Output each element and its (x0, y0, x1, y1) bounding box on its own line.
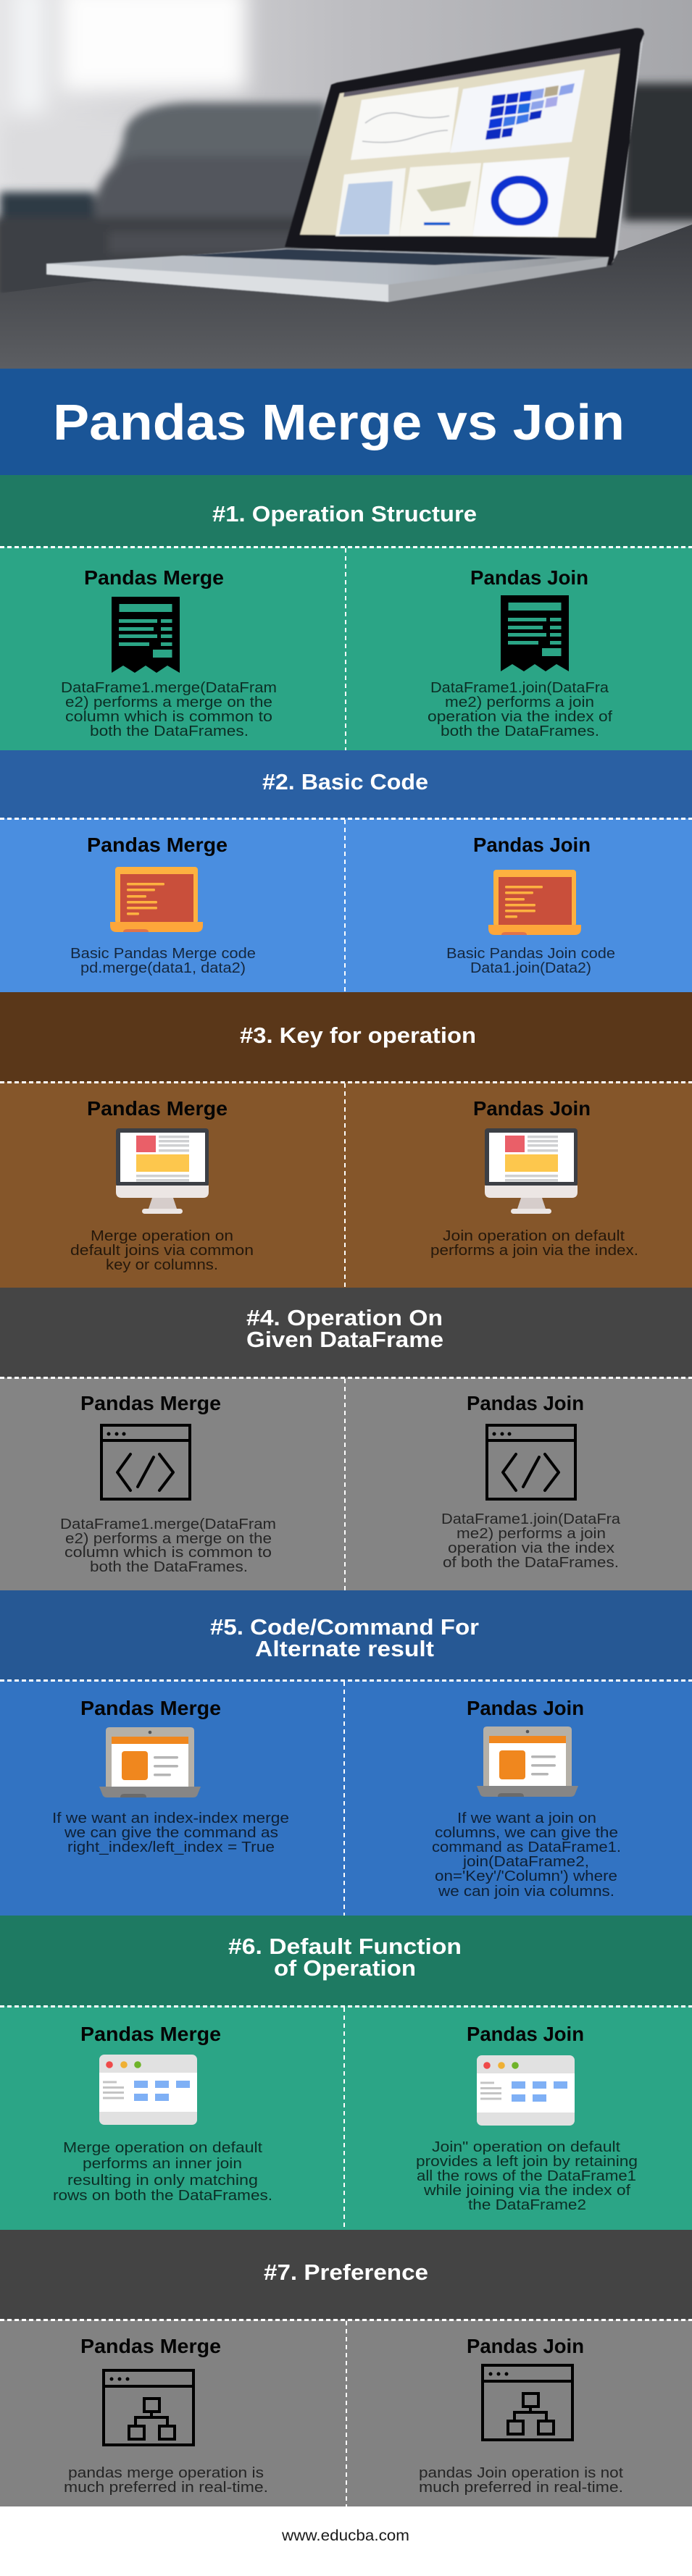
text: join alternate: command as DataFrame1. (432, 1839, 621, 1855)
text: merge key (70, 1228, 254, 1273)
column title: Pandas Merge: Pandas Merge (80, 1697, 221, 1719)
text: merge preference: much preferred in real-time. (64, 2480, 268, 2496)
title: Pandas Merge vs Join (53, 394, 625, 450)
text: merge description: both the DataFrames. (90, 723, 249, 739)
text: join description: both the DataFrames. (441, 723, 599, 739)
text: join alternate (432, 1811, 621, 1900)
heading (228, 1934, 462, 1981)
icon: code window (101, 1425, 190, 1499)
hero photo: laptop on a sofa (0, 0, 692, 369)
text: merge default: Merge operation on default (63, 2140, 262, 2156)
text: merge alternate: we can give the command as (64, 1825, 278, 1841)
text: merge description (61, 680, 277, 739)
icon: receipt (501, 595, 569, 671)
text: join alternate: If we want a join on (457, 1811, 596, 1826)
column title: Pandas Join: Pandas Join (467, 1697, 584, 1719)
icon: desktop monitor (116, 1128, 209, 1214)
heading (210, 1614, 479, 1661)
text: merge description (60, 1516, 276, 1575)
text: merge alternate (52, 1811, 289, 1855)
text: join description: of both the DataFrames. (443, 1555, 619, 1571)
text: join default: the DataFrame2 (468, 2197, 586, 2213)
text: merge description: e2) performs a merge on the (65, 695, 272, 710)
text: merge default: resulting in only matching (67, 2173, 258, 2189)
text: join description: operation via the index of (428, 709, 612, 725)
text: join code: Basic Pandas Join code (446, 946, 615, 962)
text: join alternate: columns, we can give the (435, 1825, 618, 1841)
text: join description (441, 1511, 621, 1571)
column title: Pandas Merge: Pandas Merge (87, 1097, 228, 1120)
column title: Pandas Join: Pandas Join (473, 834, 591, 856)
column title: Pandas Join: Pandas Join (467, 1392, 584, 1414)
text: merge key: key or columns. (106, 1257, 218, 1273)
icon: laptop with page (477, 1727, 578, 1797)
section 3: Key for operation (0, 992, 692, 1288)
text: merge preference: pandas merge operation is (68, 2465, 264, 2481)
icon: hierarchy window (483, 2365, 572, 2440)
text: join alternate: on='Key'/'Column') where (435, 1868, 617, 1884)
section 2: Basic Code (0, 750, 692, 992)
heading: #6. Default Function (228, 1934, 462, 1959)
text: merge default: performs an inner join (83, 2156, 242, 2172)
column title: Pandas Merge: Pandas Merge (87, 834, 228, 856)
text: join description: me2) performs a join (457, 1526, 606, 1542)
text: join description: DataFrame1.join(DataFra (430, 680, 609, 696)
icon: hierarchy window (104, 2370, 193, 2445)
section 4: Operation On Given DataFrame (0, 1288, 692, 1590)
text: merge description: e2) performs a merge on the (65, 1531, 272, 1547)
text: join alternate: join(DataFrame2, (462, 1854, 589, 1870)
text: join description: DataFrame1.join(DataFra (441, 1511, 621, 1527)
text: merge key: default joins via common (70, 1243, 254, 1259)
text: join key: Join operation on default (443, 1228, 625, 1244)
icon: browser window (477, 2055, 575, 2126)
text: join description: operation via the index (448, 1540, 614, 1556)
heading: #5. Code/Command For (210, 1614, 479, 1640)
column title: Pandas Join: Pandas Join (470, 566, 588, 589)
column title: Pandas Merge: Pandas Merge (80, 2335, 221, 2357)
text: merge default: rows on both the DataFrames. (53, 2188, 272, 2204)
heading: #4. Operation On (246, 1305, 443, 1330)
text: merge alternate: If we want an index-index merge (52, 1811, 289, 1826)
section 6: Default Function of Operation (0, 1916, 692, 2230)
section 1: Operation Structure (0, 475, 692, 750)
column title: Pandas Merge: Pandas Merge (80, 1392, 221, 1414)
text: join default: Join" operation on default (432, 2139, 621, 2155)
section 7: Preference (0, 2230, 692, 2506)
text: merge description: both the DataFrames. (90, 1559, 248, 1575)
text: merge code: pd.merge(data1, data2) (80, 960, 246, 976)
column title: Pandas Join: Pandas Join (473, 1097, 591, 1120)
icon: desktop monitor (485, 1128, 578, 1214)
text: join code (446, 946, 615, 976)
icon: browser window (99, 2055, 197, 2125)
text: merge code: Basic Pandas Merge code (70, 946, 256, 962)
icon: laptop with code (110, 867, 203, 932)
heading: #7. Preference (264, 2260, 428, 2285)
heading: Alternate result (255, 1636, 434, 1661)
text: merge key: Merge operation on (91, 1228, 233, 1244)
text: merge description: DataFrame1.merge(DataFram (60, 1516, 276, 1532)
text: merge default (53, 2140, 272, 2204)
section 5: Code/Command For Alternate result (0, 1590, 692, 1916)
text: join alternate: we can join via columns. (438, 1884, 614, 1900)
heading: of Operation (274, 1955, 416, 1981)
icon: receipt (112, 597, 180, 673)
text: join description: me2) performs a join (445, 695, 594, 710)
title band (0, 369, 692, 475)
heading (246, 1305, 443, 1352)
icon: laptop with code (488, 870, 581, 935)
text: join default: provides a left join by retaining (416, 2154, 638, 2170)
heading: Given DataFrame (246, 1327, 443, 1352)
icon: code window (487, 1425, 575, 1499)
text: join default: while joining via the index of (423, 2183, 631, 2199)
footer: website: www.educba.com (281, 2527, 409, 2544)
icon: laptop with page (99, 1727, 201, 1797)
text: merge description: DataFrame1.merge(DataFram (61, 680, 277, 696)
text: join default: all the rows of the DataFrame1 (417, 2168, 636, 2184)
heading: #2. Basic Code (262, 769, 428, 794)
text: join key: performs a join via the index. (430, 1243, 638, 1259)
text: join preference (419, 2465, 623, 2496)
text: join description (428, 680, 612, 739)
text: join code: Data1.join(Data2) (470, 960, 591, 976)
column title: Pandas Merge: Pandas Merge (84, 566, 224, 589)
text: merge preference (64, 2465, 268, 2496)
text: join preference: pandas Join operation is not (419, 2465, 623, 2481)
text: merge description: column which is common to (64, 1545, 272, 1561)
text: join preference: much preferred in real-time. (419, 2480, 623, 2496)
text: merge alternate: right_index/left_index = True (67, 1839, 275, 1855)
text: join key (430, 1228, 638, 1259)
heading: #3. Key for operation (240, 1023, 476, 1048)
heading: #1. Operation Structure (212, 501, 477, 526)
column title: Pandas Join: Pandas Join (467, 2023, 584, 2045)
text: join default (416, 2139, 638, 2213)
column title: Pandas Merge: Pandas Merge (80, 2023, 221, 2045)
text: merge code (70, 946, 256, 976)
column title: Pandas Join: Pandas Join (467, 2335, 584, 2357)
text: merge description: column which is common to (65, 709, 272, 725)
